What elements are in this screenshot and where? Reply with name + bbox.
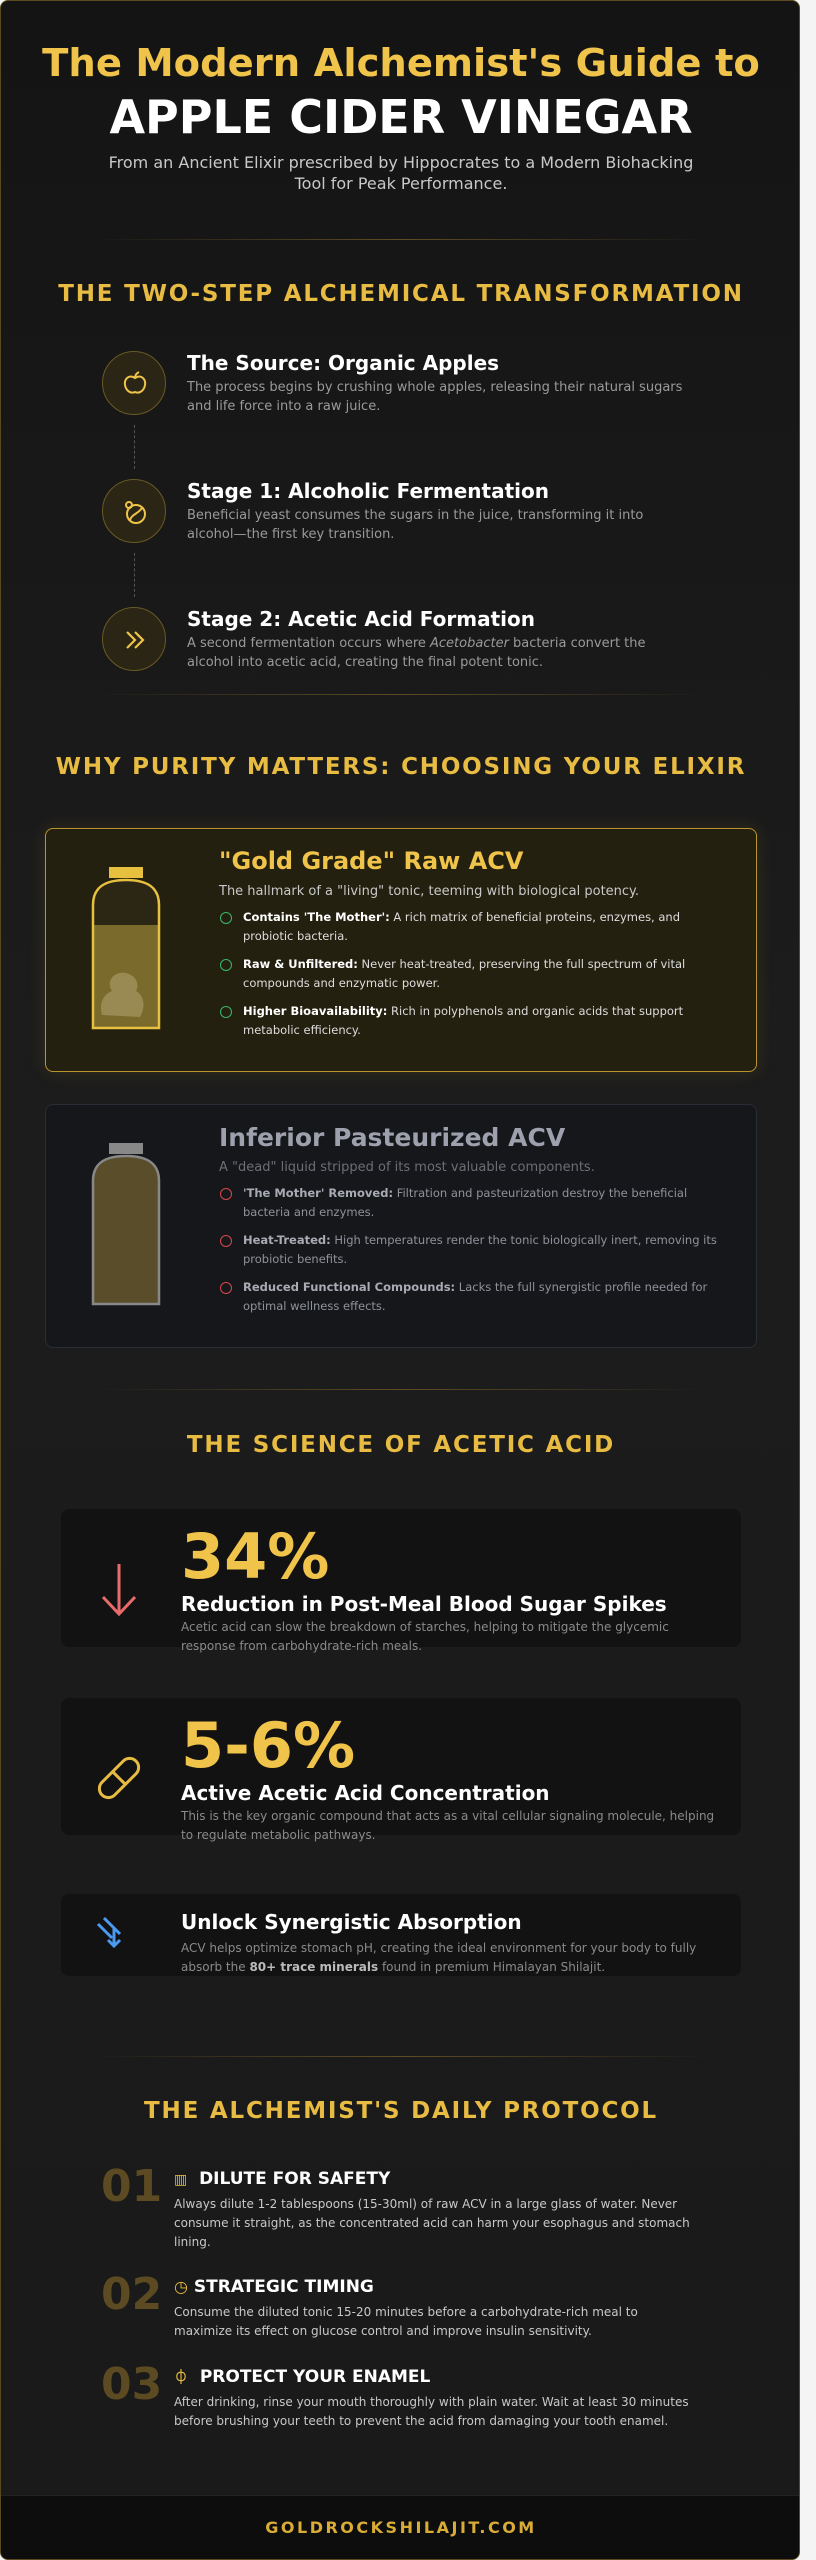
protocol item 3 — [101, 2359, 689, 2428]
stat: 5-6%: 5-6% — [181, 1709, 355, 1782]
heading: protocol: THE ALCHEMIST'S DAILY PROTOCOL — [144, 2098, 658, 2124]
subtitle: From an Ancient Elixir prescribed by Hippocrates to a Modern Biohacking — [109, 153, 693, 172]
icon: dull bottle — [92, 1143, 160, 1306]
step: acetic — [102, 607, 646, 671]
step: source: The Source: Organic Apples — [187, 351, 499, 375]
stat: 34%: Reduction in Post-Meal Blood Sugar Spikes — [181, 1592, 667, 1616]
title: APPLE CIDER VINEGAR — [109, 90, 693, 144]
panel: pasteurized: A "dead" liquid stripped of its most valuable components. — [219, 1160, 595, 1175]
icon: chevrons — [102, 607, 166, 671]
subtitle: Tool for Peak Performance. — [295, 174, 507, 193]
panel: pasteurized: Inferior Pasteurized ACV — [219, 1123, 565, 1152]
icon: glass: ▥ DILUTE FOR SAFETY — [174, 2169, 390, 2189]
step: fermentation — [102, 479, 643, 543]
list: benefits — [220, 910, 685, 1037]
step: source: The process begins by crushing whole apples, releasing their natural sugars and life force into a raw juice. — [187, 380, 682, 414]
stat: 34%: Acetic acid can slow the breakdown of starches, helping to mitigate the glycemic response from carbohydrate-rich meals. — [181, 1620, 669, 1653]
icon: apple — [102, 351, 166, 415]
icon: clock: ◷ STRATEGIC TIMING — [174, 2277, 374, 2297]
protocol item 3: After drinking, rinse your mouth thoroughly with plain water. Wait at least 30 minutes before brushing your teeth to prevent the acid from damaging your tooth enamel. — [174, 2395, 689, 2428]
stat: 5-6%: Active Acetic Acid Concentration — [181, 1781, 550, 1805]
icon: bubbles — [102, 479, 166, 543]
icon: arrows — [97, 1917, 121, 1948]
step: fermentation: Stage 1: Alcoholic Fermentation — [187, 479, 549, 503]
list: drawbacks — [220, 1186, 717, 1313]
stat: 5-6%: This is the key organic compound that acts as a vital cellular signaling molecule, helping to regulate metabolic pathways. — [181, 1809, 714, 1842]
icon: pill — [98, 1756, 140, 1800]
step: source — [102, 351, 682, 415]
panel: gold grade — [45, 828, 757, 1072]
list: drawbacks: Reduced Functional Compounds: Lacks the full synergistic profile needed for optimal wellness effects. — [243, 1280, 707, 1313]
list: benefits: Raw & Unfiltered: Never heat-treated, preserving the full spectrum of vital compounds and enzymatic power. — [243, 957, 685, 990]
stat: absorption: Unlock Synergistic Absorption — [181, 1910, 522, 1934]
heading: science: THE SCIENCE OF ACETIC ACID — [187, 1432, 615, 1458]
list: drawbacks: Heat-Treated: High temperatures render the tonic biologically inert, removing its probiotic benefits. — [243, 1233, 717, 1266]
step: acetic: Stage 2: Acetic Acid Formation — [187, 607, 535, 631]
stat: 34% — [61, 1509, 741, 1647]
panel: gold grade: The hallmark of a "living" tonic, teeming with biological potency. — [219, 884, 639, 899]
stat: absorption — [61, 1894, 741, 1976]
footer — [1, 2495, 801, 2560]
protocol item 3: 03 — [101, 2359, 162, 2410]
list: benefits: Contains 'The Mother': A rich matrix of beneficial proteins, enzymes, and probiotic bacteria. — [243, 910, 680, 943]
heading: purity: WHY PURITY MATTERS: CHOOSING YOUR ELIXIR — [56, 754, 746, 780]
heading: transformation: THE TWO-STEP ALCHEMICAL TRANSFORMATION — [58, 281, 744, 307]
icon: tooth: ⏀ PROTECT YOUR ENAMEL — [174, 2367, 430, 2387]
stat: 5-6% — [61, 1698, 741, 1835]
stat: 34%: 34% — [181, 1520, 329, 1593]
protocol item 2 — [101, 2269, 638, 2338]
subtitle — [109, 153, 693, 193]
protocol item 1 — [101, 2161, 690, 2249]
list: drawbacks: 'The Mother' Removed: Filtration and pasteurization destroy the beneficial bacteria and enzymes. — [243, 1186, 687, 1219]
title — [42, 41, 760, 144]
protocol item 2: Consume the diluted tonic 15-20 minutes before a carbohydrate-rich meal to maximize its effect on glucose control and improve insulin sensitivity. — [174, 2305, 638, 2338]
title: The Modern Alchemist's Guide to — [42, 41, 760, 86]
connector lines — [134, 425, 135, 469]
protocol item 2: 02 — [101, 2269, 162, 2320]
panel: gold grade: "Gold Grade" Raw ACV — [219, 847, 523, 875]
list: benefits: Higher Bioavailability: Rich in polyphenols and organic acids that support metabolic efficiency. — [243, 1004, 683, 1037]
panel: pasteurized — [45, 1104, 757, 1348]
protocol item 1: 01 — [101, 2161, 162, 2212]
stat: absorption: ACV helps optimize stomach pH, creating the ideal environment for your body to fully absorb the 80+ trace minerals found in premium Himalayan Shilajit. — [181, 1941, 696, 1974]
protocol item 1: Always dilute 1-2 tablespoons (15-30ml) of raw ACV in a large glass of water. Never consume it straight, as the concentrated acid can harm your esophagus and stomach lining. — [174, 2197, 690, 2249]
step: fermentation: Beneficial yeast consumes the sugars in the juice, transforming it into alcohol—the first key transition. — [187, 508, 643, 542]
icon: gold bottle — [92, 867, 160, 1030]
footer: GOLDROCKSHILAJIT.COM — [265, 2518, 537, 2537]
step: acetic: A second fermentation occurs where Acetobacter bacteria convert the alcohol into acetic acid, creating the final potent tonic. — [187, 636, 646, 670]
icon: down arrow — [102, 1564, 136, 1616]
